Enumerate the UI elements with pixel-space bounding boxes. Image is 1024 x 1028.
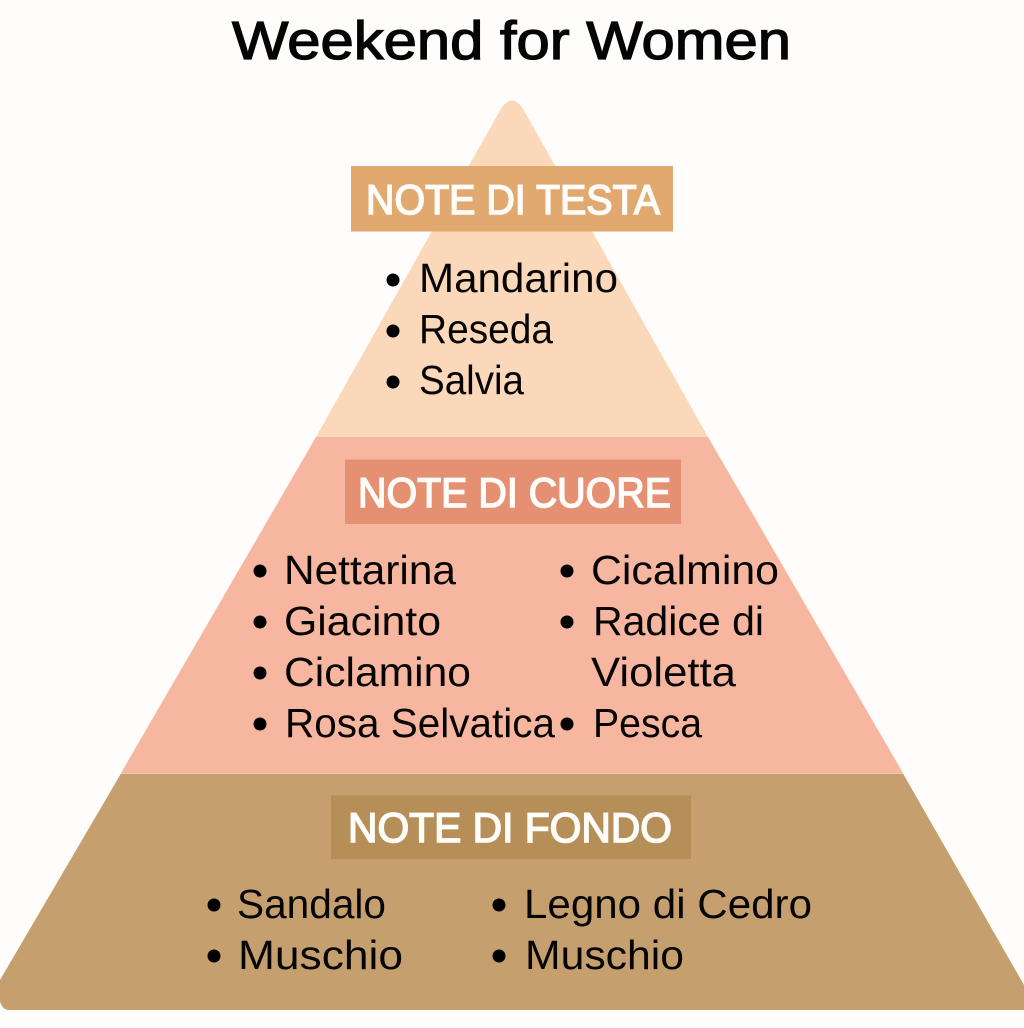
list: heart notes left column: Nettarina — [284, 547, 456, 593]
heading: note di testa — [351, 166, 673, 232]
heading: note di fondo: NOTE DI FONDO — [348, 804, 672, 851]
heading: note di testa: NOTE DI TESTA — [366, 176, 660, 223]
list: base notes left column: Muschio — [238, 932, 403, 978]
panel: base notes — [0, 774, 1024, 1010]
list: heart notes right column: Cicalmino — [591, 547, 779, 593]
list: heart notes right column — [560, 547, 779, 746]
list: top notes: Reseda — [419, 306, 553, 352]
list: heart notes right column: Violetta — [591, 649, 737, 695]
list: heart notes left column — [254, 547, 555, 746]
list: base notes right column: Muschio — [525, 932, 684, 978]
list: heart notes right column: Pesca — [593, 700, 702, 746]
heading: note di cuore: NOTE DI CUORE — [358, 469, 671, 516]
heading: note di cuore — [345, 460, 681, 524]
title: Weekend for Women — [232, 11, 791, 71]
list: base notes right column — [492, 881, 812, 978]
list: top notes: Salvia — [419, 357, 524, 403]
list: top notes — [386, 255, 618, 403]
panel: heart notes — [121, 437, 903, 773]
heading: note di fondo — [331, 796, 691, 859]
list: heart notes left column: Rosa Selvatica — [285, 700, 555, 746]
list: top notes: Mandarino — [419, 255, 618, 301]
list: heart notes left column: Ciclamino — [284, 649, 471, 695]
list: heart notes left column: Giacinto — [284, 598, 441, 644]
list: base notes left column — [208, 881, 403, 978]
list: heart notes right column: Radice di — [593, 598, 764, 644]
list: base notes left column: Sandalo — [237, 881, 386, 927]
list: base notes right column: Legno di Cedro — [524, 881, 812, 927]
panel: top notes — [316, 100, 708, 437]
